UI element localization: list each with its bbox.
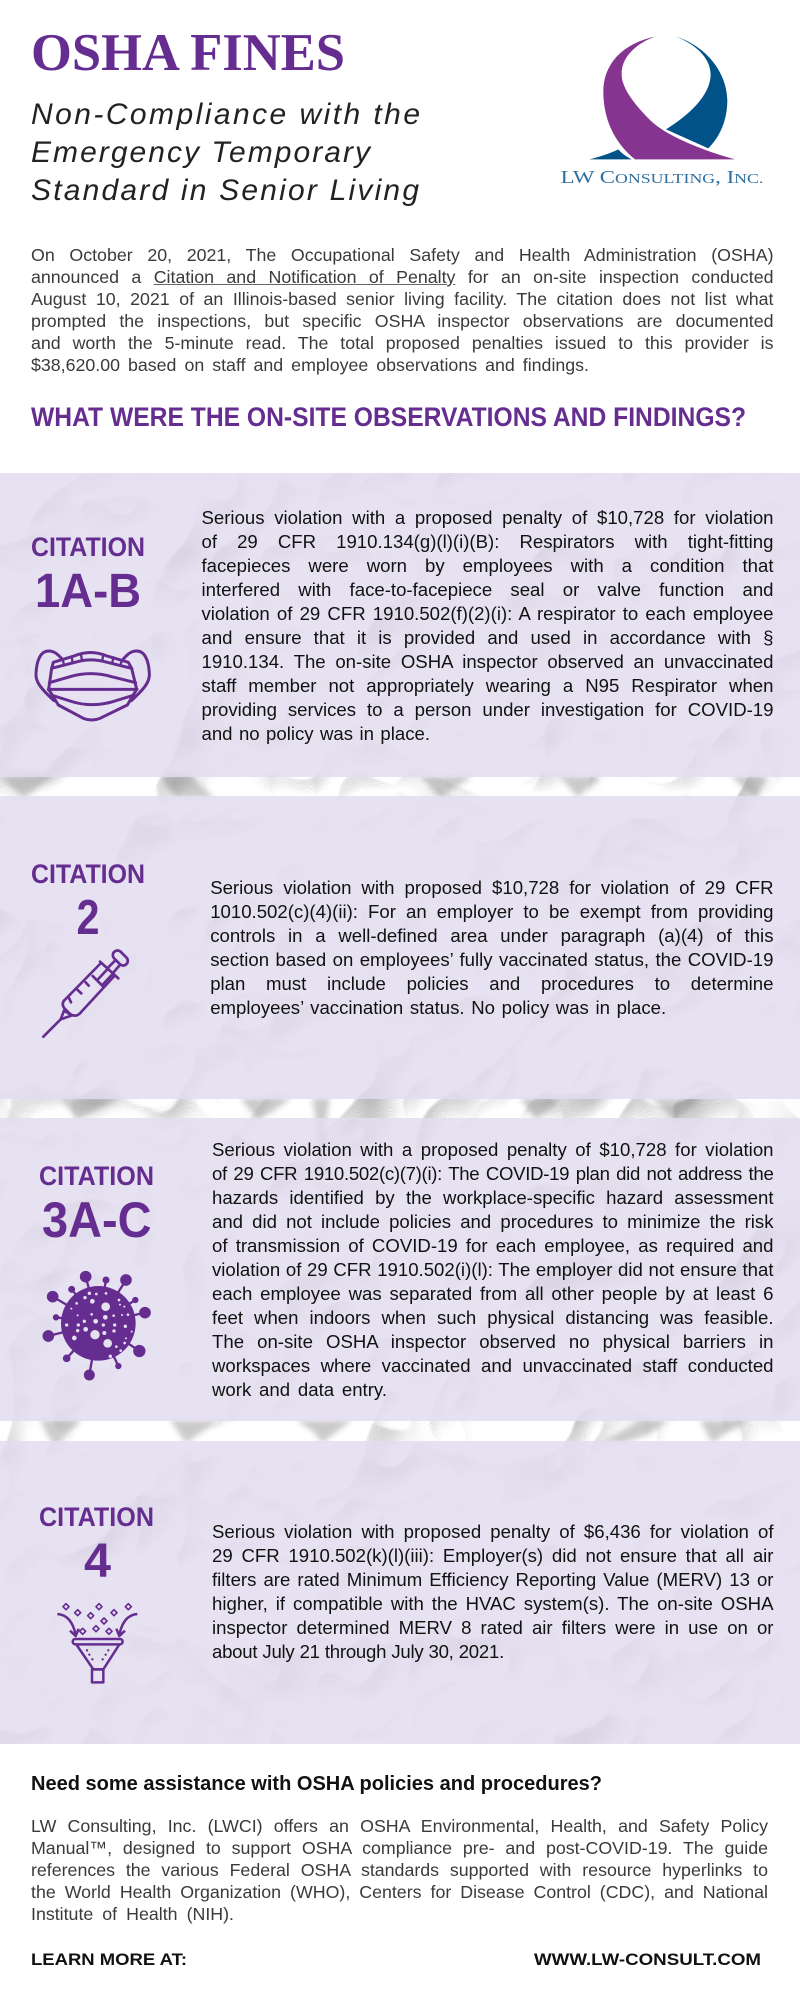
footer paragraph: the World Health Organization (WHO), Centers for Disease Control (CDC), and National [31, 1882, 768, 1902]
citation 1 text: and no policy was in place. [202, 722, 430, 744]
footer paragraph: references the various Federal OSHA standards supported with resource hyperlinks to [31, 1860, 768, 1880]
logo: LW Consulting: LW C ONSULTING , INC. [561, 167, 763, 187]
citation 2 text: employees’ vaccination status. No policy was in place. [210, 996, 666, 1018]
citation 1 label and mask icon: 1A-B [35, 565, 141, 618]
citation 4 label and filter icon: CITATION [39, 1502, 154, 1532]
citation 3 text: hazards identified by the workplace-specific hazard assessment [212, 1187, 774, 1208]
citation 1 text: of 29 CFR 1910.134(g)(l)(i)(B): Respirators with tight-fitting [202, 530, 774, 552]
panel: citation 2 [0, 796, 800, 1099]
header: subtitle: Non-Compliance with the [31, 98, 420, 131]
citation 1 text: 1910.134. The on-site OSHA inspector observed an unvaccinated [202, 650, 774, 672]
citation 2 label and syringe icon: CITATION [31, 859, 145, 889]
citation 1 text: staff member not appropriately wearing a N95 Respirator when [202, 674, 774, 696]
footer heading: Need some assistance with OSHA policies and procedures? [31, 1772, 602, 1795]
header: subtitle: Emergency Temporary [31, 136, 372, 169]
citation 2 text: controls in a well-defined area under paragraph (a)(4) of this [210, 924, 774, 946]
website url: WWW.LW-CONSULT.COM [534, 1951, 761, 1969]
citation 3 text: Serious violation with a proposed penalty of $10,728 for violation [212, 1139, 774, 1160]
citation 2 text: Serious violation with proposed $10,728 for violation of 29 CFR [210, 876, 774, 898]
citation 2 text: section based on employees’ fully vaccinated status, the COVID-19 [210, 948, 774, 970]
citation 3 text: of 29 CFR 1910.502(c)(7)(i): The COVID-19 plan did not address the [212, 1163, 774, 1184]
citation 3 label and virus icon: 3A-C [42, 1192, 152, 1248]
citation 4 text: Serious violation with proposed penalty of $6,436 for violation of [212, 1521, 774, 1542]
citation 3 text: workspaces where vaccinated and unvaccinated staff conducted [212, 1355, 774, 1376]
citation 3 text: of transmission of COVID-19 for each employee, as required and [212, 1235, 774, 1256]
panel: citation 3A-C [0, 1118, 800, 1421]
intro paragraph: On October 20, 2021, The Occupational Safety and Health Administration (OSHA) [31, 245, 774, 265]
citation 2 label and syringe icon [31, 859, 145, 1038]
citation 1 text: violation of 29 CFR 1910.502(f)(2)(i): A respirator to each employee [202, 602, 774, 624]
citation 2 text [210, 876, 774, 1018]
intro paragraph: $38,620.00 based on staff and employee observations and findings. [31, 355, 589, 375]
citation 3 label and virus icon [39, 1161, 154, 1380]
citation 1 label and mask icon [31, 532, 151, 722]
citation 1 label and mask icon: CITATION [31, 532, 145, 562]
footer paragraph: Institute of Health (NIH). [31, 1904, 234, 1924]
citation 2 text: 1010.502(c)(4)(ii): For an employer to be exempt from providing [210, 900, 774, 922]
citation 4 text: 29 CFR 1910.502(k)(l)(iii): Employer(s) did not ensure that all air [212, 1545, 774, 1566]
citation 3 text: and did not include policies and procedures to minimize the risk [212, 1211, 774, 1232]
citation 1 text: providing services to a person under investigation for COVID-19 [202, 698, 774, 720]
citation 3 text: feet when indoors when such physical distancing was feasible. [212, 1307, 774, 1328]
citation 3 label and virus icon: CITATION [39, 1161, 154, 1191]
footer paragraph: LW Consulting, Inc. (LWCI) offers an OSHA Environmental, Health, and Safety Policy [31, 1816, 768, 1836]
header: subtitle: Standard in Senior Living [31, 174, 419, 207]
intro paragraph: and worth the 5-minute read. The total proposed penalties issued to this provider is [31, 333, 774, 353]
citation 2 text: plan must include policies and procedures to determine [210, 972, 774, 994]
citation 4 text: inspector determined MERV 8 rated air filters were in use on or [212, 1617, 774, 1638]
logo: LW Consulting [561, 36, 763, 187]
citation 1 text: and ensure that it is provided and used in accordance with § [202, 626, 774, 648]
header: subtitle [31, 98, 420, 207]
panel: citation 1A-B [0, 473, 800, 777]
citation 4 text: about July 21 through July 30, 2021. [212, 1641, 504, 1662]
intro paragraph [31, 245, 774, 375]
header: title: OSHA FINES [31, 24, 345, 82]
citation 4 label and filter icon: 4 [84, 1535, 111, 1588]
citation 1 text: interfered with face-to-facepiece seal or valve function and [202, 578, 774, 600]
citation 4 label and filter icon [39, 1502, 154, 1684]
citation 2 label and syringe icon: 2 [76, 891, 100, 945]
footer paragraph [31, 1816, 768, 1924]
citation 3 text [212, 1139, 774, 1400]
citation 4 text [212, 1521, 774, 1662]
citation 1 text: facepieces were worn by employees with a condition that [202, 554, 774, 576]
crumpled paper background [0, 473, 800, 1744]
citation 1 text: Serious violation with a proposed penalty of $10,728 for violation [202, 506, 774, 528]
footer paragraph: Manual™, designed to support OSHA compliance pre- and post-COVID-19. The guide [31, 1838, 768, 1858]
citation 3 text: The on-site OSHA inspector observed no physical barriers in [212, 1331, 774, 1352]
citation 3 text: each employee was separated from all other people by at least 6 [212, 1283, 774, 1304]
citation 3 text: violation of 29 CFR 1910.502(i)(l): The employer did not ensure that [212, 1259, 774, 1280]
citation 4 text: filters are rated Minimum Efficiency Reporting Value (MERV) 13 or [212, 1569, 774, 1590]
citation 1 text [202, 506, 774, 744]
panel: citation 4 [0, 1441, 800, 1744]
intro paragraph: announced a Citation and Notification of Penalty for an on-site inspection conducted [31, 267, 774, 287]
citation 4 text: higher, if compatible with the HVAC system(s). The on-site OSHA [212, 1593, 774, 1614]
intro paragraph: August 10, 2021 of an Illinois-based senior living facility. The citation does not list what [31, 289, 774, 309]
citation 3 text: work and data entry. [212, 1379, 387, 1400]
section heading: WHAT WERE THE ON-SITE OBSERVATIONS AND FINDINGS? [31, 402, 746, 432]
learn more label: LEARN MORE AT: [31, 1951, 187, 1969]
intro paragraph: prompted the inspections, but specific OSHA inspector observations are documented [31, 311, 774, 331]
